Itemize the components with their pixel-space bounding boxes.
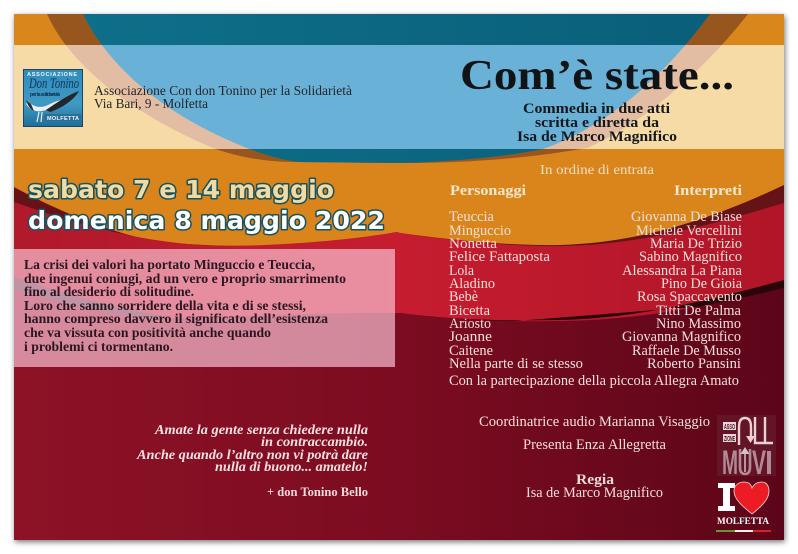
synopsis text: fino al desiderio di solitudine. [24,284,194,299]
logo: associazione: MOLFETTA [47,116,79,122]
performers list: Michele Vercellini [636,223,742,239]
special participation: Con la partecipazione della piccola Allegra Amato [449,373,739,389]
logo: i love molfetta [716,482,771,532]
dates: domenica 8 maggio 2022 [28,206,385,235]
performers list: Titti De Palma [656,303,742,319]
quote: nulla di buono... amatelo! [215,460,368,475]
quote: + don Tonino Bello [267,484,368,499]
logo: associazione: per la solidarietà [30,92,60,98]
letter I [718,483,735,511]
synopsis text: i problemi ci tormentano. [24,339,173,354]
synopsis text [24,257,346,354]
logo: all movi: ZIONE [724,436,735,443]
characters list: Joanne [449,329,492,345]
characters list [449,209,583,372]
logo: all movi: ASSO [724,424,735,431]
logo: all movi [717,415,776,482]
logo: all movi: V [752,444,766,482]
characters list: Caitene [449,343,493,359]
performers list: Raffaele De Musso [632,343,741,359]
characters list: Felice Fattaposta [449,249,551,265]
panel: synopsis [14,249,395,367]
association address: Via Bari, 9 - Molfetta [94,97,209,112]
characters list: Minguccio [449,223,511,239]
cast headings: Interpreti [674,183,742,199]
characters list: Nonetta [449,236,498,252]
characters list: Ariosto [449,316,491,332]
quote: Amate la gente senza chiedere nulla [154,423,368,438]
quote: in contraccambio. [261,435,368,450]
performers list: Sabino Magnifico [639,249,742,265]
characters list: Nella parte di se stesso [449,356,583,372]
synopsis text: Loro che sanno sorridere della vita e di se stessi, [24,298,306,313]
logo: associazione: Don Tonino [28,76,79,92]
performers list: Giovanna Magnifico [622,329,741,345]
performers list: Maria De Trizio [650,236,742,252]
performers list: Giovanna De Biase [631,209,742,225]
logo: associazione: ASSOCIAZIONE [27,72,77,78]
performers list [622,209,743,372]
performers list: Roberto Pansini [647,356,741,372]
logo: associazione [24,70,82,126]
synopsis text: due ingenui coniugi, ad un vero e proprio smarrimento [24,271,346,286]
cast headings [450,183,742,199]
quote [136,423,368,499]
dates: sabato 7 e 14 maggio [28,175,334,204]
dates [28,175,385,235]
subtitle: Isa de Marco Magnifico [517,129,677,145]
subtitle [517,101,677,145]
characters list: Teuccia [449,209,495,225]
synopsis text: La crisi dei valori ha portato Minguccio e Teuccia, [24,257,315,272]
cast intro: In ordine di entrata [540,163,655,178]
credits: Coordinatrice audio Marianna Visaggio [479,414,710,430]
tricolor line [716,530,771,532]
quote: Anche quando l’altro non vi potrà dare [136,448,368,463]
synopsis text: che va vissuta con positività anche quando [24,325,271,340]
heart [734,482,769,514]
wordmark: MOLFETTA [717,516,770,526]
title: Com’è state... [460,53,734,99]
performers list: Alessandra La Piana [622,263,743,279]
logo: all movi: M [722,444,738,482]
performers list: Rosa Spaccavento [637,289,742,305]
cast headings: Personaggi [450,183,526,199]
credits: Isa de Marco Magnifico [526,485,663,501]
subtitle: scritta e diretta da [535,115,660,131]
association address [94,84,353,112]
performers list: Nino Massimo [656,316,741,332]
characters list: Aladino [449,276,495,292]
credits: Presenta Enza Allegretta [523,437,667,453]
characters list: Bicetta [449,303,491,319]
subtitle: Commedia in due atti [523,101,670,117]
credits [479,414,710,501]
credits: Regia [576,472,615,488]
association address: Associazione Con don Tonino per la Solidarietà [94,84,353,99]
performers list: Pino De Gioia [661,276,743,292]
synopsis text: hanno compreso davvero il significato dell’esistenza [24,311,328,326]
characters list: Bebè [449,289,478,305]
characters list: Lola [449,263,475,279]
